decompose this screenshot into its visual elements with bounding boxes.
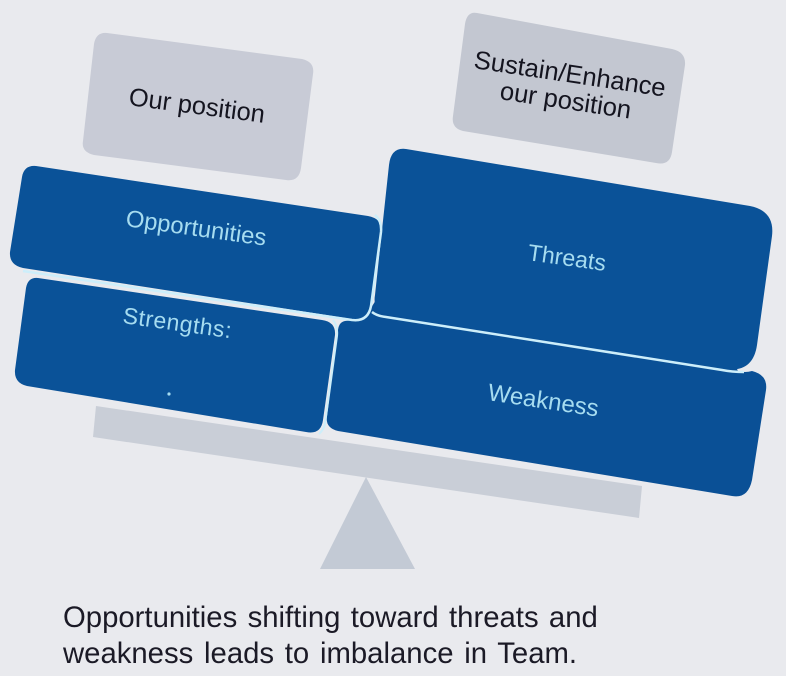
divider line between Strengths and Weakness [319, 320, 337, 434]
scale fulcrum triangle [320, 477, 415, 569]
label box: Our position: Our position [127, 83, 267, 129]
block: Threats: Threats [526, 239, 608, 276]
block: Weakness: Weakness [486, 379, 600, 422]
caption: Opportunities shifting toward threats and [63, 601, 598, 634]
divider line between Threats and Weakness [372, 312, 744, 372]
block: Weakness [327, 300, 766, 496]
caption: weakness leads to imbalance in Team. [62, 637, 577, 670]
block: Threats [375, 149, 772, 370]
block: Opportunities [10, 166, 382, 320]
label box: Sustain/Enhance our position: our position [498, 77, 633, 124]
scale beam [93, 406, 642, 518]
label box: Sustain/Enhance our position [453, 13, 685, 164]
block: Opportunities: Opportunities [124, 205, 268, 252]
label box: Our position [83, 33, 313, 180]
caption [62, 601, 598, 670]
label box: Sustain/Enhance our position: Sustain/Enhance [472, 46, 668, 103]
block: Strengths [15, 278, 335, 432]
block: Strengths: Strengths: [121, 302, 234, 343]
